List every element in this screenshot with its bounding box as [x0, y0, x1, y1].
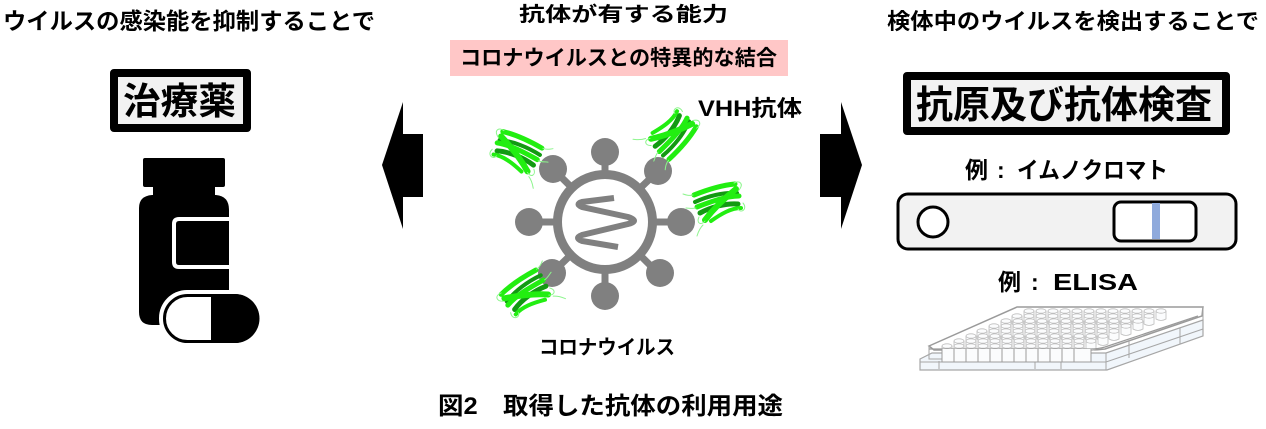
pink label: コロナウイルスとの特異的な結合: [460, 47, 777, 70]
arrow: right: [820, 102, 862, 229]
icon: coronavirus: [515, 138, 695, 310]
icon: VHH antibody top left: [486, 128, 555, 190]
coronavirus label: コロナウイルス: [539, 336, 675, 359]
icon: medicine bottle and capsule: [139, 158, 263, 347]
icon: VHH antibody top right: [627, 96, 702, 175]
left heading: ウイルスの感染能を抑制することで: [3, 8, 375, 34]
right heading: 検体中のウイルスを検出することで: [887, 9, 1259, 34]
panel: therapeutic drug label: 治療薬: [123, 81, 236, 122]
icon: immunochromatography strip: [898, 194, 1236, 249]
icon: VHH antibody right: [683, 182, 745, 236]
figure caption: 図2 取得した抗体の利用用途: [438, 393, 783, 420]
ELISA example label: 例: [998, 269, 1021, 295]
ELISA example label: ELISA: [1053, 269, 1138, 295]
immunochromatography example label: 例: [965, 157, 988, 183]
panel: antigen and antibody test label: 抗原及び抗体検査: [916, 85, 1212, 127]
center heading: 抗体が有する能力: [519, 2, 728, 26]
arrow: left: [382, 102, 423, 229]
icon: VHH antibody bottom left: [493, 253, 574, 335]
panel: therapeutic drug label: [114, 73, 247, 128]
immunochromatography example label: :: [997, 157, 1005, 183]
ELISA example label: :: [1031, 269, 1039, 295]
icon: ELISA plate: [920, 307, 1203, 370]
pink label: [450, 40, 788, 76]
VHH antibody label: VHH抗体: [698, 96, 802, 121]
immunochromatography example label: イムノクロマト: [1017, 157, 1168, 183]
